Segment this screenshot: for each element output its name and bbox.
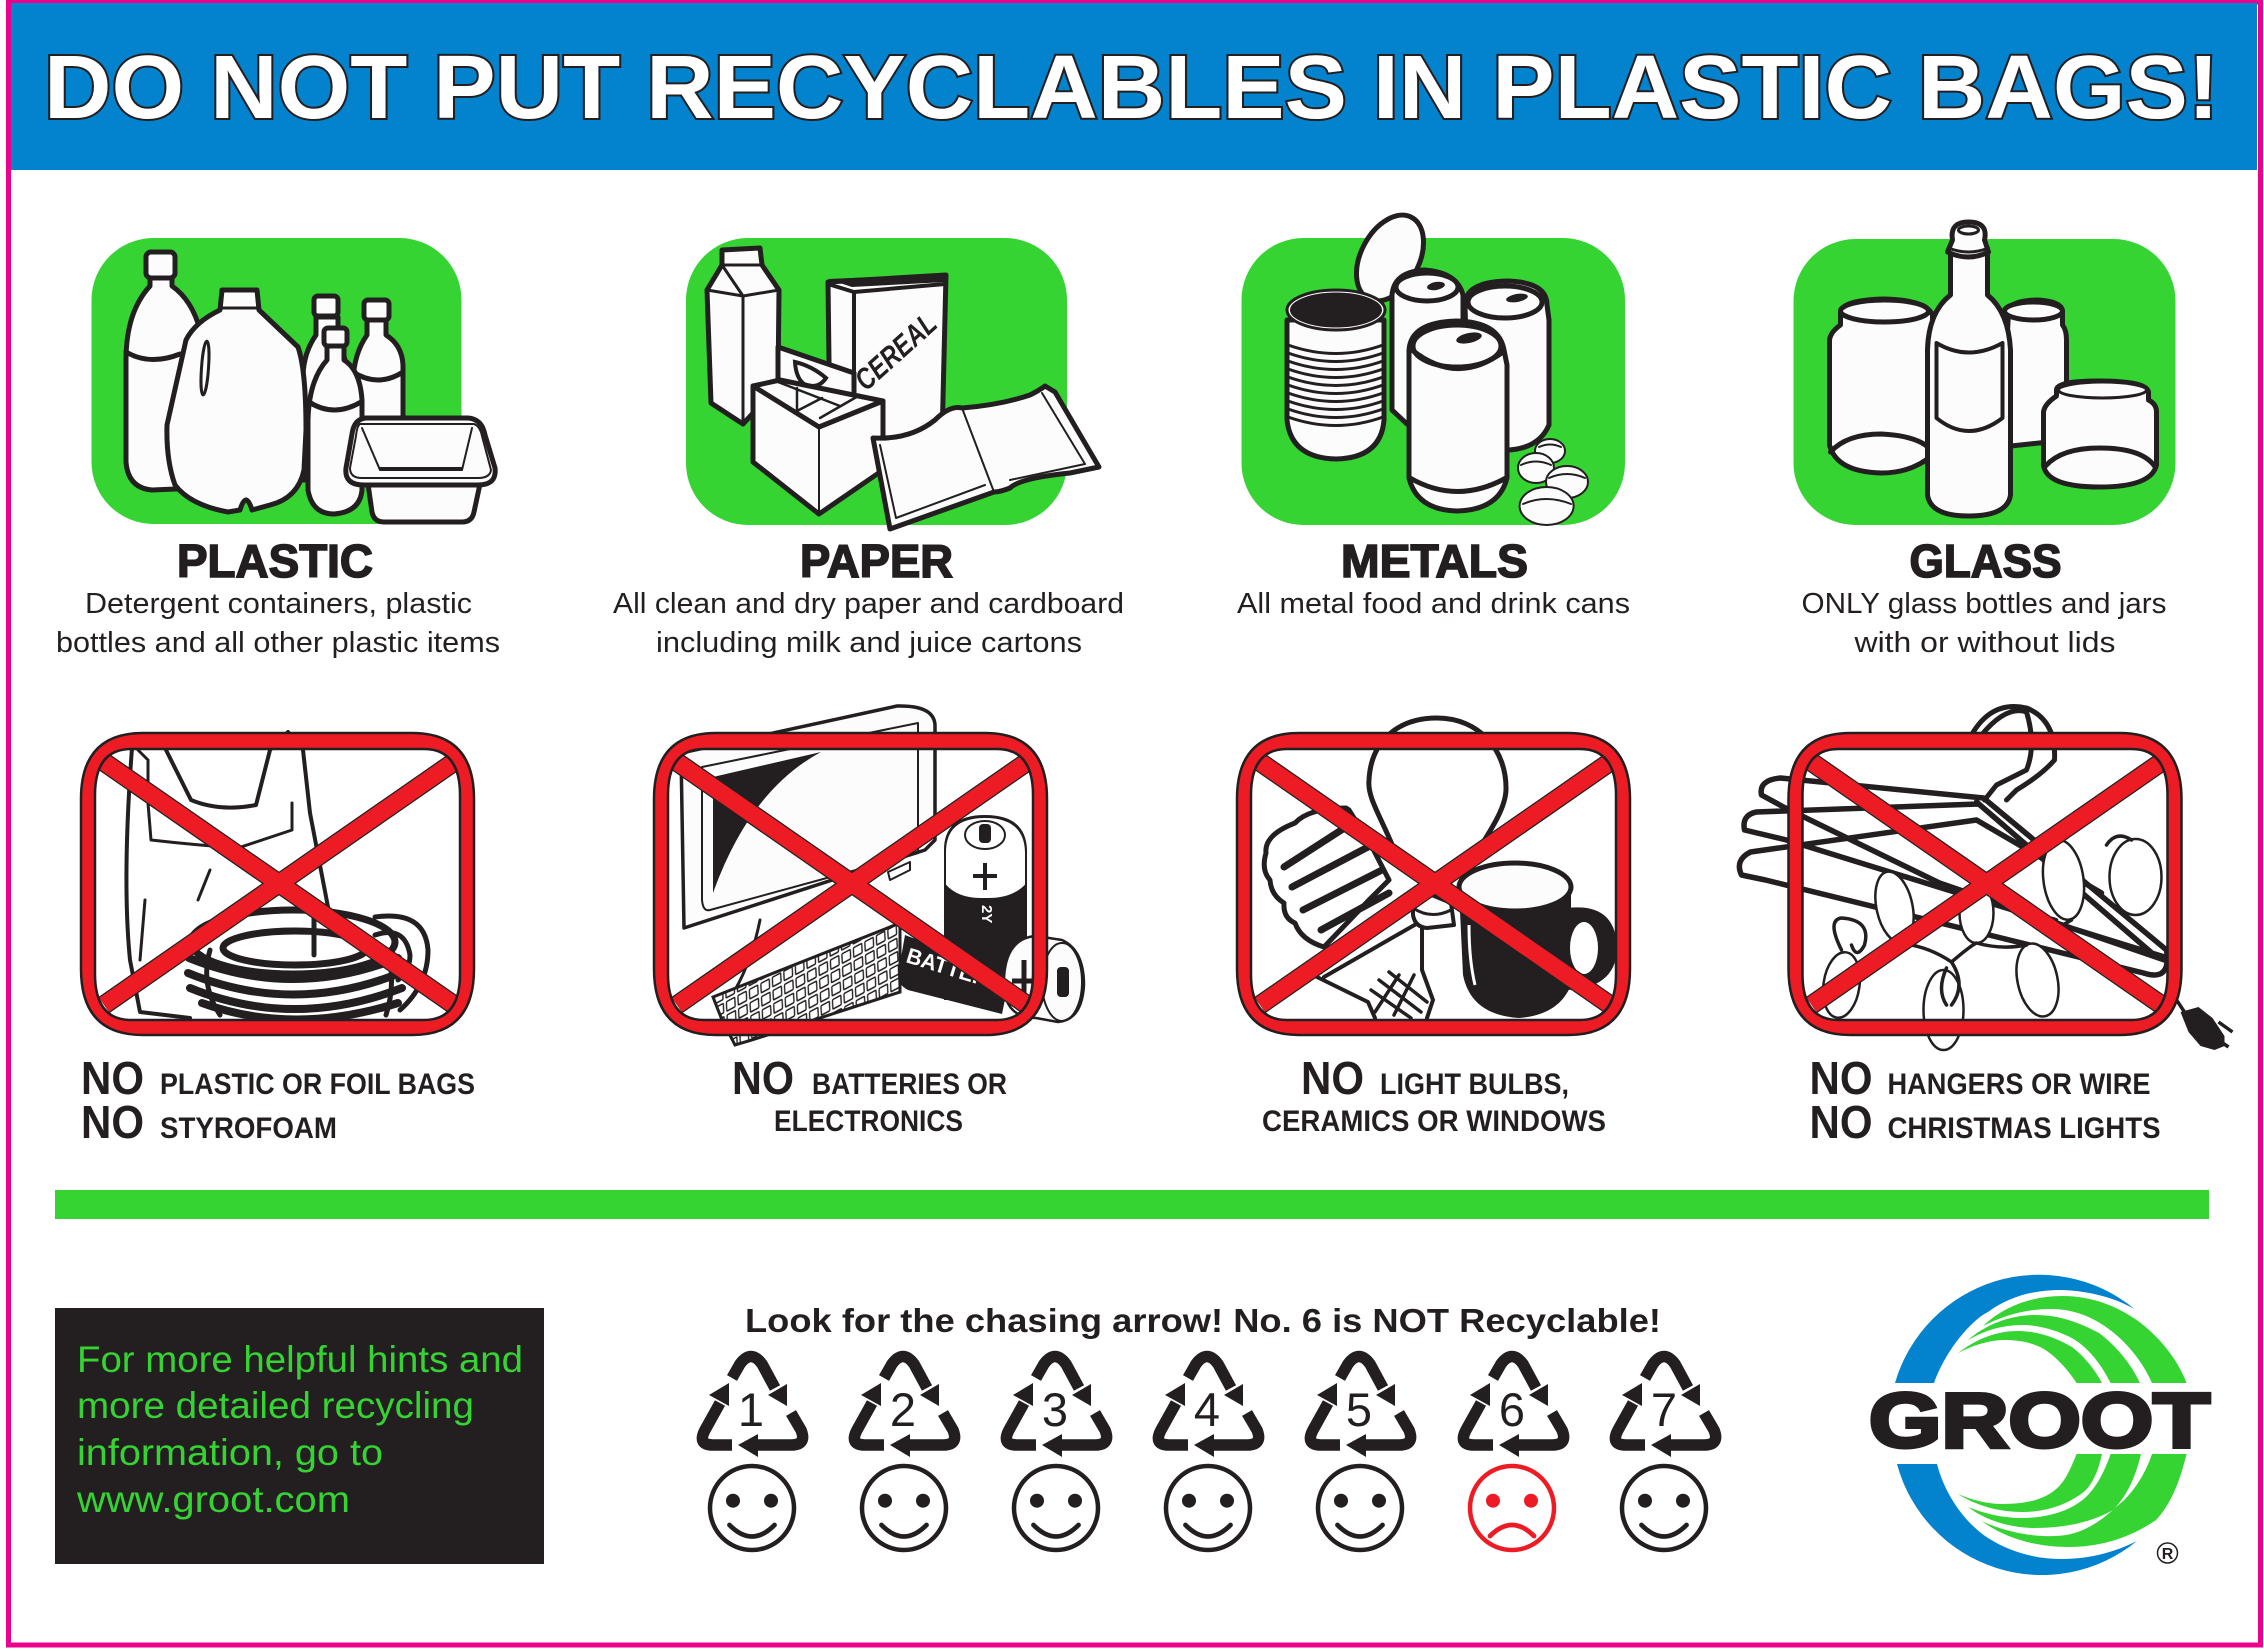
- text: no light bulbs, ceramics or windows: NO: [1301, 1052, 1364, 1104]
- callout: website: more detailed recycling: [77, 1385, 474, 1426]
- icon: glass bottle and jars: [1830, 222, 2156, 516]
- icon: happy face 3: [1014, 1466, 1098, 1550]
- symbol 5: 5: [1346, 1383, 1372, 1436]
- icon: happy face 1: [710, 1466, 794, 1550]
- panel: no light bulbs, ceramics or windows: [1237, 718, 1630, 1138]
- symbol 7: 7: [1651, 1383, 1677, 1436]
- text: glass description: with or without lids: [1853, 627, 2116, 659]
- symbol 3: 3: [1042, 1383, 1068, 1436]
- text: metals description: All metal food and drink cans: [1237, 588, 1630, 620]
- panel: no hangers, wire or christmas lights: [1739, 707, 2232, 1148]
- text: no plastic or foil bags, no styrofoam: PLASTIC OR FOIL BAGS: [160, 1068, 475, 1101]
- callout: website: For more helpful hints and: [77, 1339, 523, 1380]
- text: paper description: [613, 588, 1124, 659]
- symbol 4: [1158, 1356, 1259, 1457]
- text: no plastic or foil bags, no styrofoam: NO: [81, 1096, 144, 1148]
- icon: carton, cereal box, carrier and book: [707, 248, 1099, 529]
- text: plastic description: [56, 588, 500, 659]
- icon: prohibition sign: [1788, 733, 2182, 1035]
- text: no light bulbs, ceramics or windows: LIGHT BULBS,: [1380, 1068, 1569, 1101]
- symbol 2: 2: [890, 1383, 916, 1436]
- panel: no plastic bags or styrofoam: [81, 732, 475, 1148]
- text: glass description: ONLY glass bottles and jars: [1802, 588, 2166, 620]
- text: no batteries or electronics: BATTERIES OR: [812, 1068, 1007, 1101]
- text: no plastic or foil bags, no styrofoam: STYROFOAM: [160, 1112, 337, 1145]
- icon: hangers and christmas lights: [1739, 707, 2232, 1050]
- icon: happy face 4: [1166, 1466, 1250, 1550]
- icon: computer and batteries: [681, 706, 1084, 1045]
- registered mark: [2158, 1543, 2178, 1563]
- text: no light bulbs, ceramics or windows: [1262, 1052, 1606, 1138]
- symbol 2: [854, 1356, 955, 1457]
- text: plastic description: Detergent containers, plastic: [85, 588, 472, 620]
- title: DO NOT PUT RECYCLABLES IN PLASTIC BAGS!: [44, 38, 2219, 138]
- symbol 6: [1463, 1356, 1564, 1457]
- text: cereal: CEREAL: [849, 307, 944, 397]
- icon: cans and bottle caps: [1287, 204, 1588, 525]
- text: battery label: BATTERY: [904, 943, 1005, 996]
- icon: sad face: [1470, 1466, 1554, 1550]
- text: glass description: [1802, 588, 2166, 659]
- label: paper: PAPER: [800, 535, 953, 587]
- callout: website: information, go to: [77, 1432, 383, 1473]
- icon: plastic bag and coiled wire: [126, 732, 428, 1020]
- icon: plastic bottles, jug and tub: [126, 252, 495, 522]
- symbol 5: [1310, 1356, 1411, 1457]
- callout: website: www.groot.com: [76, 1479, 350, 1520]
- text: battery rotated label: 2Y: [978, 905, 995, 923]
- text: paper description: including milk and juice cartons: [656, 627, 1082, 659]
- text: plastic description: bottles and all other plastic items: [56, 627, 500, 659]
- symbol 4: 4: [1194, 1383, 1220, 1436]
- heading: chasing arrows: Look for the chasing arrow! No. 6 is NOT Recyclable!: [745, 1302, 1661, 1339]
- text: no hangers or wire, no christmas lights: NO: [1810, 1052, 1872, 1104]
- panel: metals: [1237, 204, 1630, 620]
- icon: prohibition sign: [81, 733, 474, 1035]
- logo: Groot: [1869, 1275, 2210, 1575]
- text: no batteries or electronics: NO: [732, 1052, 794, 1104]
- green divider bar: [55, 1190, 2209, 1219]
- text: Groot wordmark: GROOT: [1869, 1378, 2210, 1464]
- label: plastic: PLASTIC: [177, 535, 373, 587]
- icon: light bulbs and mug: [1264, 718, 1617, 1018]
- symbol 6: 6: [1499, 1383, 1525, 1436]
- symbol 7: [1615, 1356, 1716, 1457]
- panel: chasing arrows: [702, 1302, 1716, 1550]
- text: no hangers or wire, no christmas lights: [1810, 1052, 2160, 1148]
- header banner: [11, 3, 2257, 170]
- text: no batteries or electronics: [732, 1052, 1007, 1138]
- icon: happy face 2: [862, 1466, 946, 1550]
- panel: no batteries or electronics: [654, 706, 1084, 1138]
- text: no light bulbs, ceramics or windows: CERAMICS OR WINDOWS: [1262, 1105, 1606, 1138]
- text: no hangers or wire, no christmas lights: NO: [1810, 1096, 1872, 1148]
- registered mark: R: [2162, 1546, 2174, 1563]
- icon: prohibition sign: [654, 733, 1047, 1035]
- symbol 1: 1: [738, 1383, 764, 1436]
- text: no hangers or wire, no christmas lights: CHRISTMAS LIGHTS: [1888, 1112, 2160, 1145]
- symbol 3: [1006, 1356, 1107, 1457]
- text: paper description: All clean and dry paper and cardboard: [613, 588, 1124, 620]
- text: no hangers or wire, no christmas lights: HANGERS OR WIRE: [1888, 1068, 2150, 1101]
- icon: happy face 5: [1318, 1466, 1402, 1550]
- text: no plastic or foil bags, no styrofoam: [81, 1052, 475, 1148]
- callout: website: [55, 1308, 544, 1564]
- label: glass: GLASS: [1910, 535, 2062, 587]
- icon: prohibition sign: [1237, 733, 1630, 1035]
- text: no batteries or electronics: ELECTRONICS: [774, 1105, 963, 1138]
- panel: plastic: [56, 238, 500, 659]
- symbol 1: [702, 1356, 803, 1457]
- panel: paper: [613, 238, 1124, 659]
- icon: happy face 7: [1622, 1466, 1706, 1550]
- panel: glass: [1794, 222, 2176, 659]
- text: no plastic or foil bags, no styrofoam: NO: [81, 1052, 144, 1104]
- label: metals: METALS: [1341, 535, 1528, 587]
